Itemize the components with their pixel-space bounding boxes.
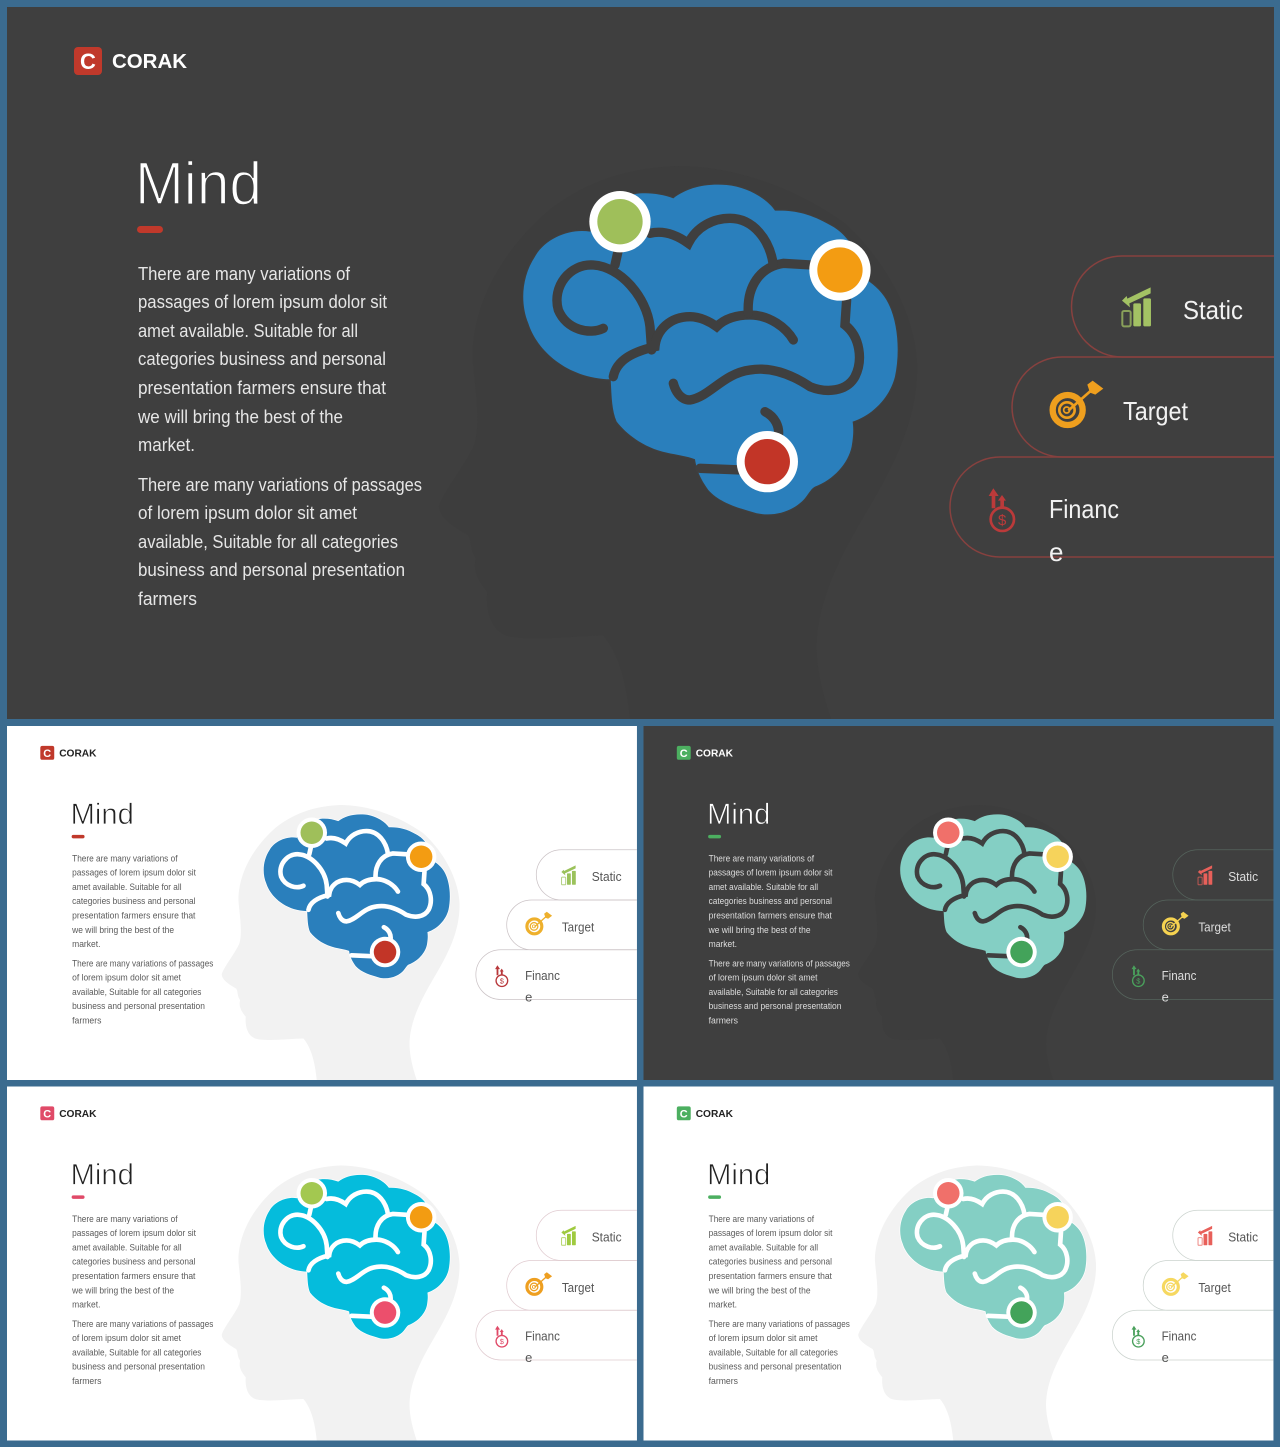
text block: available, Suitable for all categories [72,1347,202,1357]
text block: presentation farmers ensure that [72,910,196,920]
text block: we will bring the best of the [71,1285,174,1295]
text block: business and personal presentation [72,1001,205,1011]
panel: white slide with blue brain [7,726,637,1080]
heading accent [72,835,85,838]
heading accent [72,1195,85,1199]
text block: market. [709,939,737,949]
text block: There are many variations of [72,1214,178,1224]
heading: Mind [707,1158,770,1191]
text block: of lorem ipsum dolor sit amet [138,503,357,523]
pill: Finance: e [1162,989,1169,1004]
head silhouette [858,805,1096,1080]
pill: Finance: Financ [1162,1329,1197,1344]
pill: Target [1143,1261,1273,1310]
pill: Finance: e [1162,1350,1169,1365]
heading accent [137,226,163,233]
pill: Finance: e [1049,537,1063,567]
panel: large dark slide with blue brain [7,7,1274,719]
logo [677,1106,734,1120]
pill: Finance: $ [998,512,1007,529]
pill: Static: Static [1228,869,1259,884]
pill: Finance [950,457,1274,567]
pill: Finance: e [525,989,532,1004]
pill: Static: Static [1228,1230,1259,1245]
text block: presentation farmers ensure that [709,910,832,920]
text block: There are many variations of [72,854,178,864]
text block: There are many variations of passages [709,959,850,969]
text block: There are many variations of [138,264,351,284]
text block: market. [709,1299,737,1309]
pill: Finance [1112,1310,1273,1365]
pill: Target: Target [1198,1280,1231,1295]
text block [71,854,214,1025]
text block: amet available. Suitable for all [709,882,818,892]
text block: market. [72,1299,100,1309]
text block: passages of lorem ipsum dolor sit [72,868,196,878]
text block: farmers [709,1376,738,1386]
text block: passages of lorem ipsum dolor sit [138,292,387,312]
brain with markers [900,814,1086,978]
text block: There are many variations of passages [138,475,422,495]
panel: white slide with cyan brain [7,1086,637,1441]
text block: There are many variations of [709,1214,815,1224]
brain with markers [523,185,898,514]
logo [40,1106,97,1120]
text block: There are many variations of passages [72,959,214,969]
text block: market. [138,435,195,455]
logo: CORAK [59,748,97,759]
text block: amet available. Suitable for all [72,882,182,892]
text block: There are many variations of passages [72,1319,214,1329]
pill: Finance [1112,950,1273,1004]
text block [708,1214,850,1386]
pill: Finance: Financ [1162,968,1197,983]
text block: categories business and personal [72,896,195,906]
text block: categories business and personal [709,1256,832,1266]
pill: Finance: $ [1136,977,1141,986]
text block: of lorem ipsum dolor sit amet [709,973,818,983]
text block: categories business and personal [72,1256,195,1266]
pill: Target [1142,900,1231,950]
text block: we will bring the best of the [708,1285,811,1295]
brain with markers [900,1175,1086,1339]
text block: farmers [138,589,197,609]
heading: Mind [71,798,134,831]
pill: Target: Target [562,1280,595,1295]
text block: available, Suitable for all categories [709,987,838,997]
text block [137,264,422,609]
text block: business and personal presentation [709,1001,841,1011]
pill: Finance: $ [1136,1337,1141,1346]
brain with markers [264,1175,450,1339]
text block: we will bring the best of the [708,925,811,935]
text block: business and personal presentation [72,1361,205,1371]
panel: white slide with teal brain [644,1086,1273,1441]
pill: Finance: Financ [525,1329,560,1344]
text block: we will bring the best of the [137,407,343,427]
pill: Target [507,1261,637,1310]
pill: Static: Static [592,1230,622,1245]
logo: CORAK [59,1109,97,1120]
text block: presentation farmers ensure that [72,1271,196,1281]
head silhouette [858,1166,1096,1441]
text block: passages of lorem ipsum dolor sit [709,1228,833,1238]
text block: available, Suitable for all categories [138,532,398,552]
logo: C [43,748,51,760]
brain with markers [264,814,450,978]
pill: Target: Target [1198,919,1231,934]
text block: business and personal presentation [138,560,405,580]
text block [708,854,850,1025]
text block: presentation farmers ensure that [709,1271,832,1281]
pill: Static [1173,1210,1273,1261]
logo: CORAK [112,50,187,73]
text block: passages of lorem ipsum dolor sit [72,1228,196,1238]
text block: passages of lorem ipsum dolor sit [709,868,833,878]
pill: Static: Static [1183,295,1243,325]
text block: of lorem ipsum dolor sit amet [709,1333,818,1343]
pill: Static [1072,256,1274,357]
text block: of lorem ipsum dolor sit amet [72,1333,181,1343]
pill: Target [507,900,637,950]
pill: Finance: Financ [525,968,560,983]
logo: C [680,1108,688,1120]
pill: Static [536,850,637,900]
pill: Static [1173,850,1273,900]
text block [71,1214,214,1386]
text block: categories business and personal [138,349,386,369]
text block: we will bring the best of the [71,925,174,935]
text block: There are many variations of [709,854,815,864]
logo [677,746,734,760]
logo: C [80,49,96,74]
logo [74,47,187,75]
heading accent [708,835,721,838]
head silhouette [222,1166,460,1441]
pill: Finance [476,1310,637,1365]
pill: Static [536,1210,637,1261]
text block: presentation farmers ensure that [138,378,386,398]
text block: business and personal presentation [709,1361,841,1371]
text block: market. [72,939,100,949]
text block: available, Suitable for all categories [709,1347,838,1357]
logo: C [680,748,688,760]
pill: Target: Target [562,919,595,934]
pill: Static: Static [592,869,622,884]
text block: farmers [709,1015,738,1025]
text block: There are many variations of passages [709,1319,850,1329]
text block: farmers [72,1376,102,1386]
logo: CORAK [696,1109,734,1120]
logo: CORAK [696,748,734,759]
heading: Mind [71,1158,134,1191]
logo: C [43,1108,51,1120]
heading: Mind [707,798,770,831]
text block: categories business and personal [709,896,832,906]
heading accent [708,1195,721,1199]
text block: amet available. Suitable for all [72,1243,182,1253]
pill: Finance: $ [500,1337,505,1346]
pill: Finance: e [525,1350,532,1365]
logo [40,746,97,760]
text block: available, Suitable for all categories [72,987,202,997]
head silhouette [439,166,917,719]
pill: Finance [476,950,637,1004]
heading: Mind [135,150,262,217]
text block: of lorem ipsum dolor sit amet [72,973,181,983]
head silhouette [222,805,460,1080]
panel: dark slide with teal brain [644,726,1273,1080]
pill: Finance: Financ [1049,494,1119,524]
pill: Target: Target [1123,396,1189,426]
text block: farmers [72,1015,102,1025]
text block: amet available. Suitable for all [709,1243,818,1253]
pill: Finance: $ [500,977,505,986]
text block: amet available. Suitable for all [138,321,358,341]
pill: Target [1012,357,1274,457]
